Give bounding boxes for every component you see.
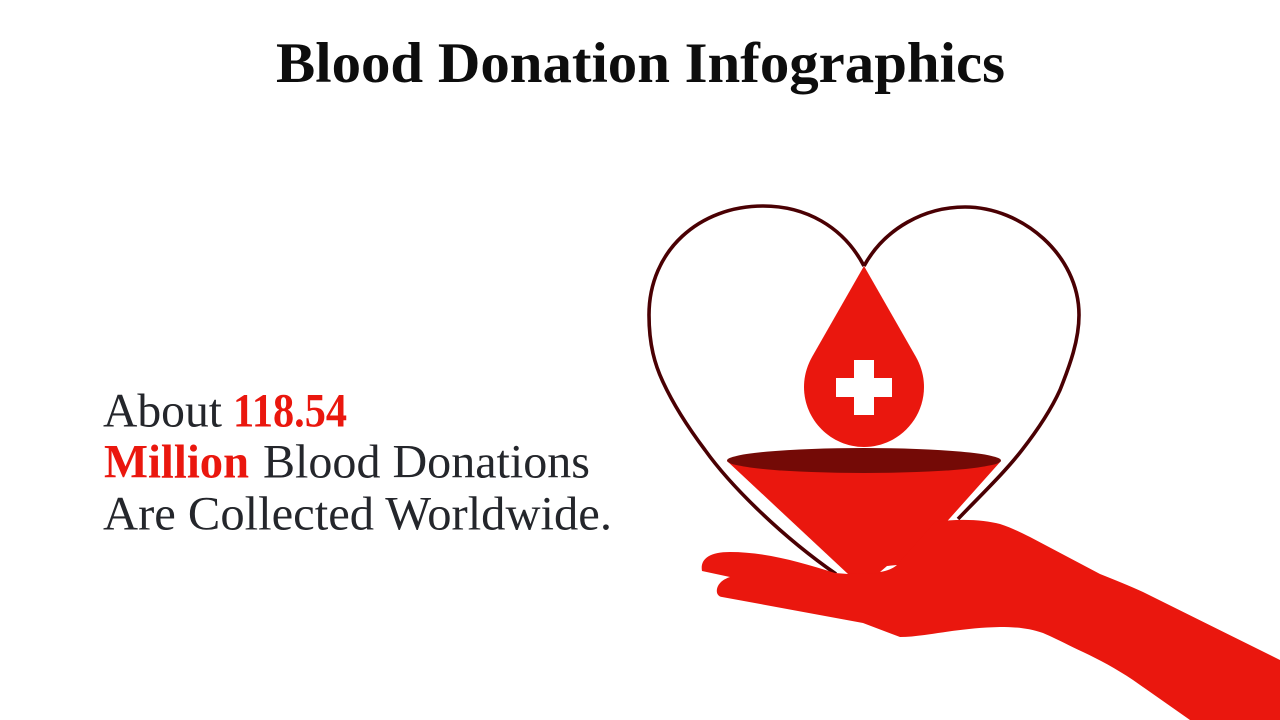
text block: donation statistic: Million xyxy=(104,436,249,488)
icon: blood drop with cross xyxy=(804,266,924,447)
title: Blood Donation Infographics xyxy=(276,32,1005,95)
text block: donation statistic: Are Collected Worldwide. xyxy=(103,488,612,540)
white gap in palm xyxy=(880,565,897,572)
text block: donation statistic xyxy=(103,384,612,540)
text block: donation statistic: Blood Donations xyxy=(263,436,590,488)
icon: heart outline xyxy=(649,206,1079,574)
icon: funnel xyxy=(727,448,1001,574)
illustration: hand holding funnel, heart and blood drop xyxy=(649,206,1280,720)
text block: donation statistic: About xyxy=(103,384,223,438)
icon: hand xyxy=(702,520,1280,720)
text block: donation statistic: 118.54 xyxy=(233,384,347,438)
